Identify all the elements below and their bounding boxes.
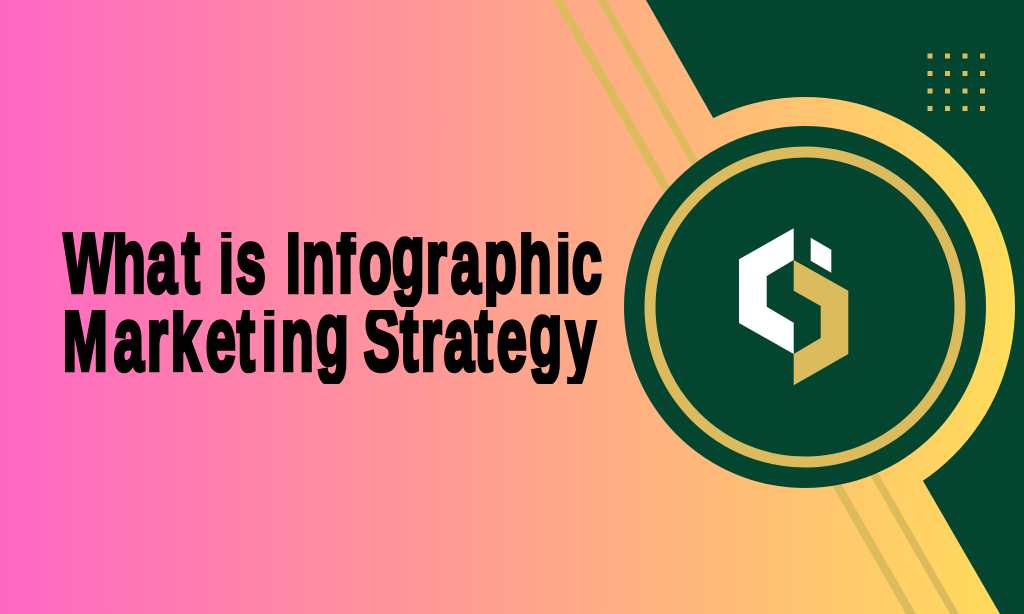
icon: hexagonal logo: [739, 228, 848, 385]
gold inner ring: [650, 152, 960, 462]
title: Strategy: [364, 284, 596, 389]
title: Marketing: [63, 284, 349, 389]
dark badge circle: [624, 126, 986, 488]
title: What: [63, 211, 200, 311]
diagonal gold stripes: [553, 0, 959, 614]
gradient ring around badge: [595, 97, 1015, 517]
dot grid: [928, 54, 985, 111]
dark green corner panel: [646, 0, 1024, 614]
title: is: [219, 211, 266, 311]
title: [62, 232, 602, 384]
title: Infographic: [286, 206, 602, 311]
